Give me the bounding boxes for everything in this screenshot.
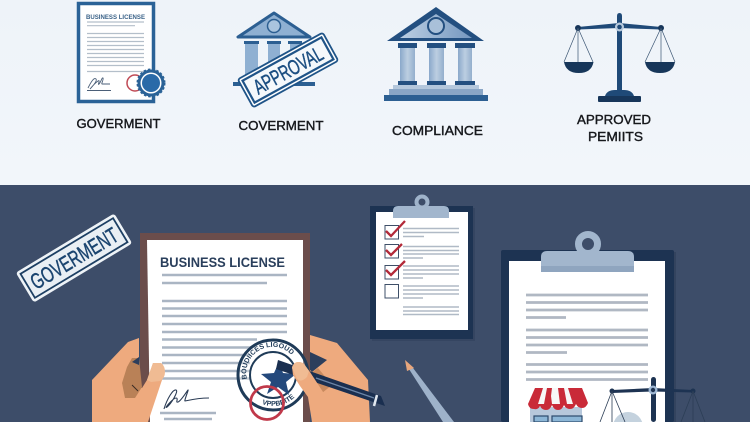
seal: circular stamp with star: BOUDIICES LIGOUD xyxy=(241,342,294,380)
right hand holding the license xyxy=(310,335,370,422)
check marks xyxy=(386,221,405,275)
stamp: approval: APPROVAL xyxy=(250,42,327,99)
clip xyxy=(393,196,449,218)
label: goverment: GOVERMENT xyxy=(76,116,161,131)
panel: top icon row background xyxy=(0,0,750,185)
seal: circular stamp with star xyxy=(236,338,310,421)
icon: business license document: BUSINESS LICENSE xyxy=(86,14,146,21)
label: approved permits: APPROVED xyxy=(577,112,651,127)
pen and writing hand xyxy=(276,360,385,422)
small checklist clipboard xyxy=(370,196,475,341)
icon: business license document xyxy=(78,4,164,102)
icon: courthouse xyxy=(384,7,488,101)
large clipboard with permit document xyxy=(501,234,676,422)
checkboxes xyxy=(385,226,398,298)
icon: scales on permit document xyxy=(600,377,705,422)
clip xyxy=(541,234,634,272)
label: approved permits: PEMIITS xyxy=(588,129,643,144)
seal: circular stamp with star: VPPBBITE xyxy=(263,394,294,406)
left hand holding the license xyxy=(92,338,165,422)
clipboard: business license held in hands xyxy=(140,233,310,422)
panel: dark desk background xyxy=(0,185,750,422)
stamp: goverment: GOVERMENT xyxy=(26,222,123,294)
checklist text lines xyxy=(403,228,459,314)
label: approved permits xyxy=(577,112,651,144)
icon: courthouse with approval stamp xyxy=(233,13,338,107)
text lines on license xyxy=(162,275,287,378)
icon: storefront xyxy=(528,388,588,422)
label: compliance: COMPLIANCE xyxy=(392,123,483,138)
permit text lines xyxy=(526,295,648,380)
pencil xyxy=(405,360,454,422)
label: coverment: COVERMENT xyxy=(238,118,324,133)
heading: business license: BUSINESS LICENSE xyxy=(160,254,285,270)
icon: scales of justice xyxy=(564,13,675,102)
stamp: goverment xyxy=(16,213,132,303)
signature xyxy=(160,390,216,419)
